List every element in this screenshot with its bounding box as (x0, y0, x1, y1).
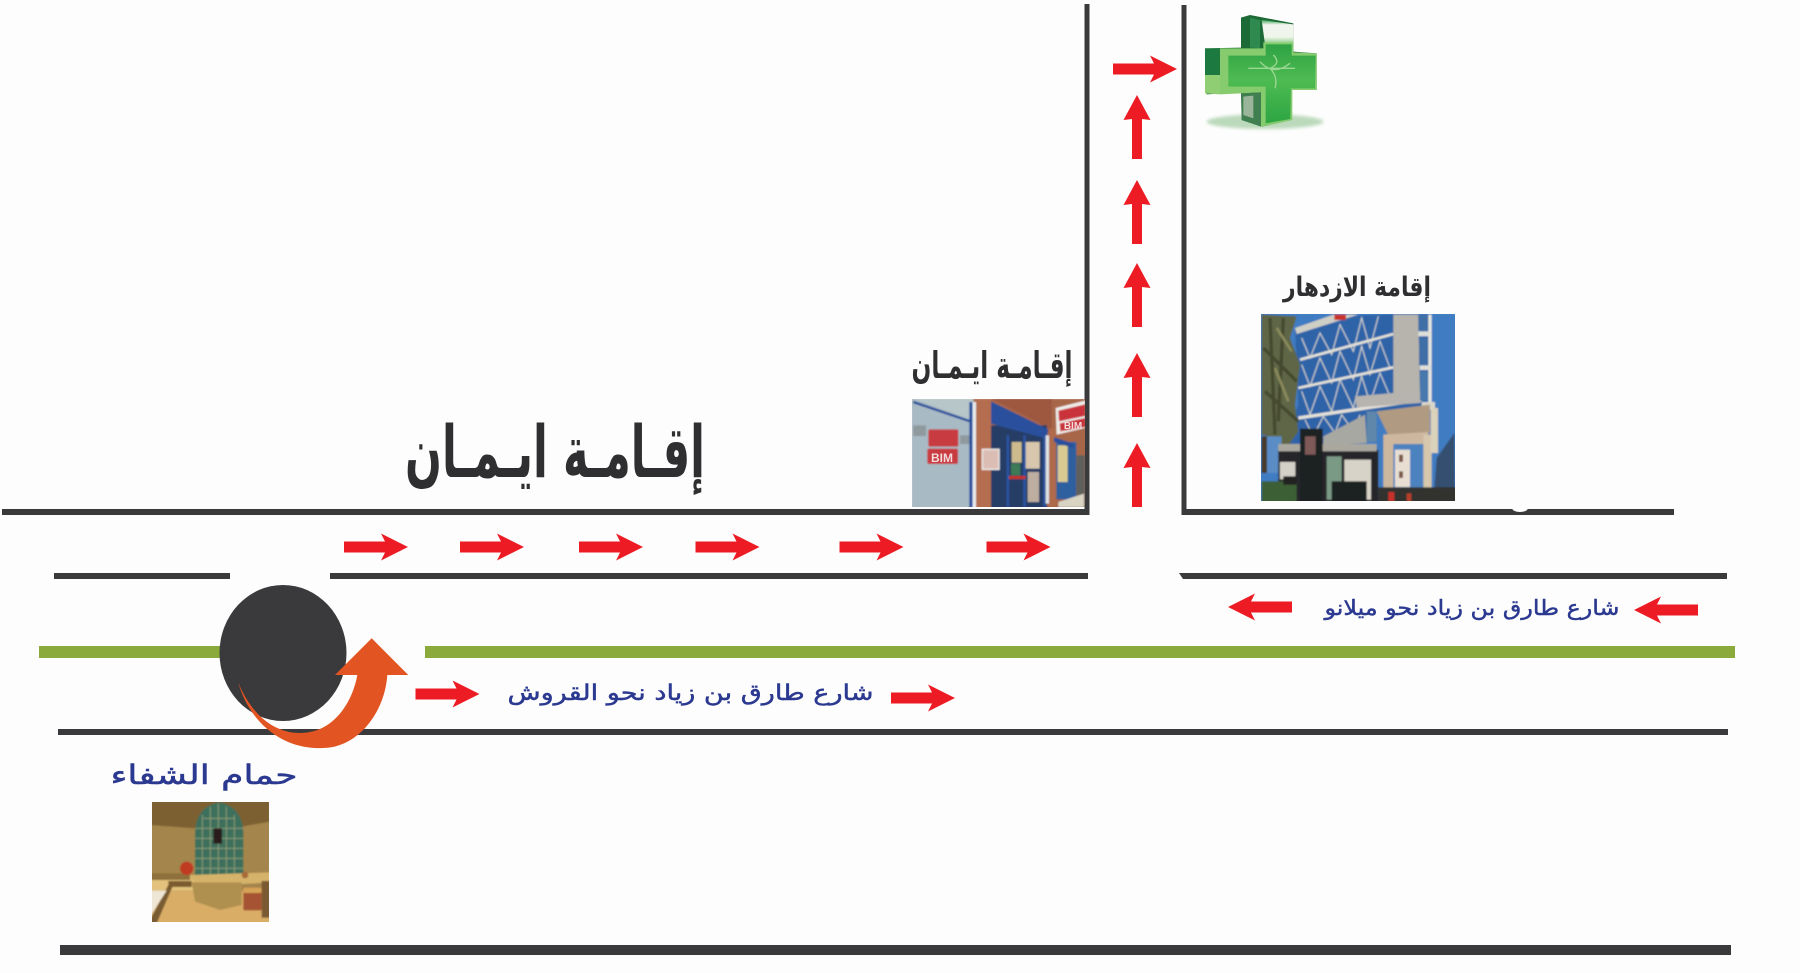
label: Iman residence: إقـامـة ايـمـان (912, 344, 1072, 387)
arrows: vertical route to pharmacy (1113, 56, 1177, 507)
street label: towards Grouch: شارع طارق بن زياد نحو القروش (508, 681, 874, 706)
shop sign text (931, 421, 1082, 465)
photo: Al Izdihar building (1260, 313, 1457, 503)
label: Al Izdihar residence: إقامة الازدهار (1281, 272, 1431, 303)
arrows: horizontal route along Iman residence (344, 534, 1050, 560)
roundabout (220, 585, 346, 721)
photo: BIM store (912, 399, 1087, 509)
big heading: Iman residence: إقـامـة ايـمـان (405, 410, 705, 495)
photo: Al Shifa hammam (150, 800, 270, 924)
arrows: street towards Milano (1228, 594, 1698, 624)
shop sign text: BIM (1064, 421, 1082, 432)
shop sign text: BIM (931, 451, 953, 465)
orange turn arrow (238, 638, 408, 748)
street label: towards Milano: شارع طارق بن زياد نحو ميلانو (1323, 596, 1620, 620)
arrows: street towards Grouch (416, 680, 955, 712)
label: Al Shifa hammam: حمام الشفاء (110, 760, 298, 791)
icon: green pharmacy cross (1205, 15, 1323, 129)
green median strip (39, 646, 1735, 658)
